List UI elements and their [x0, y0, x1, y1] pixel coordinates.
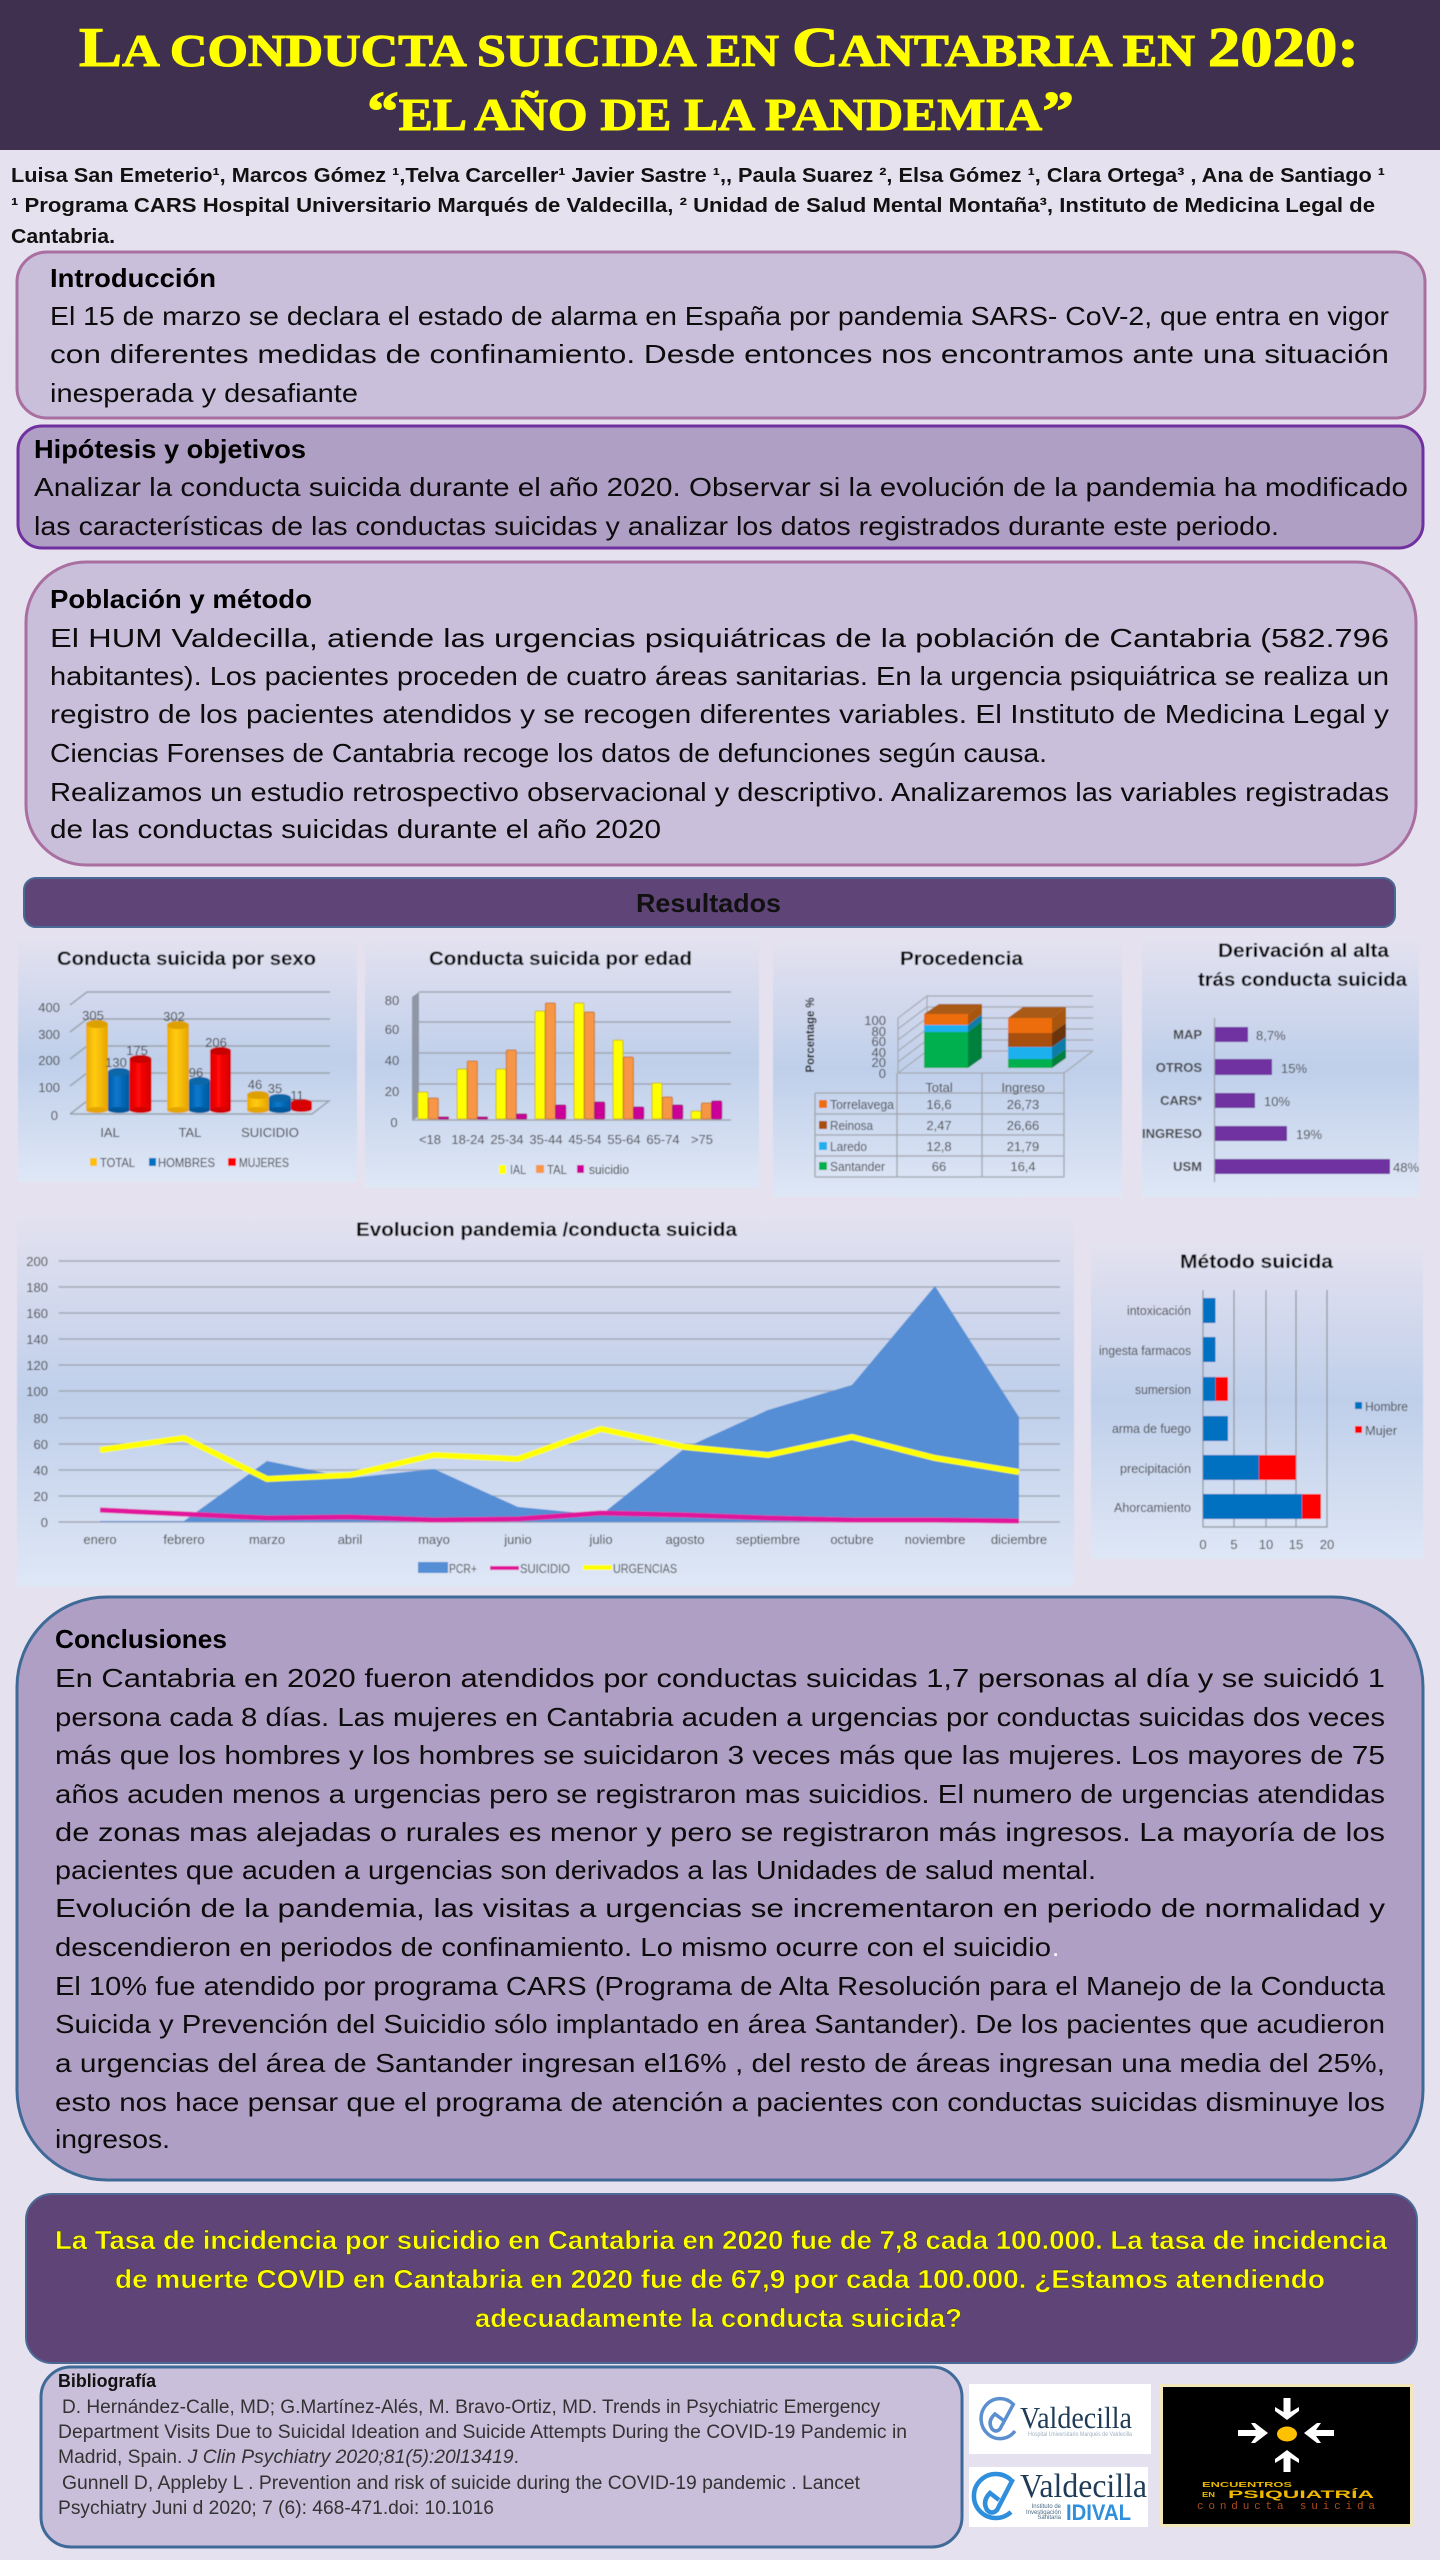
chart: conducta suicida por edad: 60 — [385, 1022, 399, 1037]
month labels: septiembre — [736, 1532, 800, 1547]
chart: evolución pandemia / conducta suicida — [17, 1212, 1074, 1587]
data table — [815, 1073, 1064, 1177]
logo: encuentros en psiquiatría — [1162, 2386, 1412, 2526]
month labels: julio — [588, 1532, 613, 1547]
text: conclusiones: Evolución de la pandemia, las visitas a urgencias se incrementaron en periodo de normalidad y — [55, 1893, 1385, 1923]
category labels: CARS* — [1160, 1093, 1203, 1108]
chart: conducta suicida por sexo: 0 — [51, 1108, 58, 1123]
legend — [418, 1561, 677, 1576]
category labels: OTROS — [1156, 1060, 1202, 1075]
chart: conducta suicida por edad: 80 — [385, 993, 399, 1008]
bars: suicidio — [247, 1091, 312, 1113]
logo: Valdecilla hospital: Valdecilla — [1020, 2400, 1132, 2435]
data labels: 130 — [105, 1055, 127, 1070]
bars: TAL — [428, 1003, 711, 1119]
chart: conducta suicida por sexo: 400 — [38, 1000, 60, 1015]
legend: MUJERES — [239, 1155, 289, 1170]
text: introducción: inesperada y desafiante — [50, 378, 358, 408]
x axis ticks — [1199, 1537, 1334, 1552]
legend: URGENCIAS — [613, 1561, 677, 1576]
text: población: El HUM Valdecilla, atiende las urgencias psiquiátricas de la población de Cantabria (582.796 — [50, 623, 1389, 653]
legend: TOTAL — [100, 1155, 135, 1170]
y axis ticks: 40 — [872, 1045, 886, 1060]
data table: 26,73 — [1007, 1097, 1039, 1112]
y axis labels: 60 — [34, 1437, 48, 1452]
category labels — [1099, 1303, 1191, 1515]
callout: tasa de incidencia — [26, 2194, 1417, 2363]
data table: 2,47 — [926, 1118, 952, 1133]
text: hipótesis: Analizar la conducta suicida durante el año 2020. Observar si la evolución de la pandemia ha modificado — [34, 472, 1408, 502]
category labels: MAP — [1173, 1027, 1202, 1042]
chart: conducta suicida por edad: 40 — [385, 1053, 399, 1068]
data labels: 175 — [126, 1043, 148, 1058]
area: PCR+ — [100, 1286, 1019, 1522]
month labels: febrero — [163, 1532, 205, 1547]
data table: Total — [925, 1080, 953, 1095]
chart title: Método suicida — [1180, 1252, 1333, 1273]
data table: 26,66 — [1007, 1118, 1039, 1133]
legend — [499, 1162, 629, 1177]
value labels: 19% — [1296, 1127, 1322, 1142]
logo: Valdecilla IDIVAL: Investigación — [1026, 2510, 1061, 2516]
month labels: agosto — [665, 1532, 705, 1547]
text: conclusiones: persona cada 8 días. Las mujeres en Cantabria acuden a urgencias por conductas suicidas dos veces — [55, 1702, 1385, 1732]
legend — [1355, 1399, 1408, 1438]
chart: conducta suicida por sexo — [18, 937, 357, 1182]
value labels: 10% — [1264, 1094, 1290, 1109]
chart: derivación al alta — [1142, 937, 1419, 1197]
chart: conducta suicida por sexo: 100 — [38, 1080, 60, 1095]
bars: suicidio — [439, 1101, 722, 1119]
icon: converging arrows — [1238, 2398, 1334, 2472]
chart: conducta suicida por edad — [365, 937, 759, 1188]
category labels: 35-44 — [529, 1132, 563, 1147]
heading: población: Población y método — [50, 584, 312, 614]
category labels: TAL — [179, 1125, 201, 1140]
icon: swirl — [981, 2399, 1015, 2439]
references: Gunnell D, Appleby L . Prevention and risk of suicide during the COVID-19 pandemic . Lancet — [62, 2473, 861, 2494]
legend: HOMBRES — [158, 1155, 215, 1170]
data table: Ingreso — [1001, 1080, 1045, 1095]
banner: resultados: Resultados — [636, 888, 781, 918]
category labels: 25-34 — [490, 1132, 524, 1147]
authors and affiliations: ¹ Programa CARS Hospital Universitario Marqués de Valdecilla, ² Unidad de Salud Mental Montaña³, Instituto de Medicina Legal de — [11, 195, 1375, 217]
line: urgencias — [100, 1429, 1019, 1479]
text: conclusiones: ingresos. — [55, 2124, 170, 2154]
text: conclusiones: pacientes que acuden a urgencias son derivados a las Unidades de salud mental. — [55, 1855, 1096, 1885]
title — [79, 17, 1359, 143]
x axis ticks: 5 — [1230, 1537, 1238, 1552]
legend: PCR+ — [449, 1561, 477, 1576]
text: conclusiones: En Cantabria en 2020 fueron atendidos por conductas suicidas 1,7 personas al día y se suicidó 1 — [55, 1663, 1385, 1693]
references: Department Visits Due to Suicidal Ideation and Suicide Attempts During the COVID-19 Pandemic in — [58, 2422, 907, 2443]
references: D. Hernández-Calle, MD; G.Martínez-Alés, M. Bravo-Ortiz, MD. Trends in Psychiatric Emergency — [62, 2397, 880, 2418]
month labels: noviembre — [905, 1532, 965, 1547]
y axis ticks: 100 — [864, 1013, 886, 1028]
callout: tasa de incidencia: La Tasa de incidencia por suicidio en Cantabria en 2020 fue de 7,8 cada 100.000. La tasa de incidencia — [55, 2225, 1388, 2255]
heading: introducción: Introducción — [50, 263, 216, 293]
text: conclusiones: El 10% fue atendido por programa CARS (Programa de Alta Resolución para el Manejo de la Conducta — [55, 1971, 1386, 2001]
month labels: junio — [503, 1532, 532, 1547]
data labels: 46 — [248, 1077, 262, 1092]
category labels: >75 — [691, 1132, 713, 1147]
text: población: habitantes). Los pacientes proceden de cuatro áreas sanitarias. En la urgencia psiquiátrica se realiza un — [50, 661, 1389, 691]
text: introducción: con diferentes medidas de confinamiento. Desde entonces nos encontramos ante una situación — [50, 339, 1389, 369]
data table: Laredo — [830, 1139, 867, 1154]
header banner — [0, 0, 1440, 150]
category labels: INGRESO — [1142, 1126, 1202, 1141]
references: Psychiatry Juni d 2020; 7 (6): 468-471.doi: 10.1016 — [58, 2498, 494, 2519]
category labels: ingesta farmacos — [1099, 1343, 1191, 1358]
chart: conducta suicida por sexo: 200 — [38, 1053, 60, 1068]
panel: población y método — [26, 562, 1416, 865]
line: suicidio — [100, 1510, 1019, 1521]
text: introducción: El 15 de marzo se declara el estado de alarma en España por pandemia SARS- CoV-2, que entra en vigor — [50, 301, 1389, 331]
y axis labels: 20 — [34, 1489, 48, 1504]
value labels: 48% — [1393, 1160, 1419, 1175]
logo: Valdecilla IDIVAL: Valdecilla — [1020, 2468, 1147, 2505]
y axis ticks: 60 — [872, 1034, 886, 1049]
month labels: diciembre — [991, 1532, 1047, 1547]
month labels — [83, 1532, 1047, 1547]
data labels: 96 — [189, 1065, 203, 1080]
references — [58, 2397, 907, 2519]
category labels: 45-54 — [568, 1132, 602, 1147]
value labels: 8,7% — [1256, 1028, 1286, 1043]
data table: 12,8 — [926, 1139, 952, 1154]
category labels — [419, 1132, 713, 1147]
data labels: 302 — [163, 1009, 185, 1024]
logo: Valdecilla hospital — [969, 2384, 1151, 2454]
data table: 66 — [932, 1159, 946, 1174]
chart title: Evolucion pandemia /conducta suicida — [356, 1220, 737, 1241]
chart: conducta suicida por sexo: 300 — [38, 1027, 60, 1042]
text: conclusiones: más que los hombres y los hombres se suicidaron 3 veces más que las mujeres. Los mayores de 75 — [55, 1740, 1385, 1770]
legend: Hombre — [1365, 1399, 1408, 1414]
legend — [90, 1155, 289, 1170]
category labels: intoxicación — [1127, 1303, 1191, 1318]
panel: bibliografía — [41, 2367, 962, 2547]
text: conclusiones: a urgencias del área de Santander ingresan el16% , del resto de áreas ingresan una media del 25%, — [55, 2048, 1385, 2078]
legend: suicidio — [589, 1162, 629, 1177]
text: conclusiones: Suicida y Prevención del Suicidio sólo implantado en área Santander). De los pacientes que acudieron — [55, 2009, 1385, 2039]
y axis labels — [26, 1254, 48, 1530]
x axis ticks: 0 — [1199, 1537, 1207, 1552]
chart title: Conducta suicida por sexo — [57, 949, 316, 970]
x axis ticks: 10 — [1259, 1537, 1273, 1552]
legend: Mujer — [1365, 1423, 1398, 1438]
logo: Valdecilla IDIVAL — [969, 2467, 1148, 2527]
text: población: Ciencias Forenses de Cantabria recoge los datos de defunciones según causa. — [50, 738, 1047, 768]
chart: procedencia — [773, 940, 1122, 1197]
y axis ticks: 20 — [872, 1055, 886, 1070]
legend: TAL — [547, 1162, 567, 1177]
data table: 21,79 — [1007, 1139, 1039, 1154]
month labels: octubre — [830, 1532, 874, 1547]
heading: bibliografía: Bibliografía — [58, 2371, 157, 2391]
category labels: IAL — [100, 1125, 120, 1140]
category labels: 18-24 — [451, 1132, 485, 1147]
category labels: Ahorcamiento — [1114, 1500, 1191, 1515]
data labels: 206 — [205, 1035, 227, 1050]
text: población: Realizamos un estudio retrospectivo observacional y descriptivo. Analizaremos las variables registradas — [50, 777, 1389, 807]
bars — [1215, 1027, 1390, 1174]
month labels: abril — [338, 1532, 362, 1547]
month labels: marzo — [249, 1532, 285, 1547]
text: introducción — [50, 301, 1389, 408]
logo: encuentros en psiquiatría: EN — [1202, 2492, 1215, 2499]
authors and affiliations: Luisa San Emeterio¹, Marcos Gómez ¹,Telva Carceller¹ Javier Sastre ¹,, Paula Suarez ², Elsa Gómez ¹, Clara Ortega³ , Ana de Santiago ¹ — [11, 165, 1385, 187]
bars: IAL — [418, 1003, 701, 1119]
text: hipótesis — [34, 472, 1408, 541]
category labels: 55-64 — [607, 1132, 641, 1147]
authors and affiliations — [11, 165, 1385, 248]
text: conclusiones: de zonas mas alejadas o rurales es menor y pero se registraron más ingresos. La mayoría de los — [55, 1817, 1385, 1847]
references: Madrid, Spain. J Clin Psychiatry 2020;81(5):20l13419 . — [58, 2447, 519, 2468]
authors and affiliations: Cantabria. — [11, 226, 115, 248]
y axis title: Porcentage % — [803, 997, 817, 1072]
stacked bar: total — [924, 1004, 982, 1068]
panel: hipótesis y objetivos — [18, 426, 1423, 548]
logo: Valdecilla IDIVAL: Sanitaria — [1037, 2515, 1062, 2521]
stacked bar: ingreso — [1008, 1007, 1066, 1068]
chart: conducta suicida por edad: 0 — [390, 1115, 398, 1130]
callout: tasa de incidencia: de muerte COVID en Cantabria en 2020 fue de 67,9 por cada 100.000. ¿Estamos atendiendo — [115, 2264, 1325, 2294]
text: conclusiones: descendieron en periodos de confinamiento. Lo mismo ocurre con el suicidio — [55, 1932, 1051, 1962]
data table: Reinosa — [830, 1118, 874, 1133]
logo: Valdecilla IDIVAL: Instituto de — [1032, 2504, 1062, 2510]
legend: IAL — [510, 1162, 526, 1177]
y axis labels: 140 — [26, 1332, 48, 1347]
y axis labels: 0 — [41, 1515, 48, 1530]
y axis labels: 180 — [26, 1280, 48, 1295]
data labels: 11 — [290, 1088, 304, 1103]
data table: 16,6 — [926, 1097, 952, 1112]
logo: encuentros en psiquiatría: PSIQUIATRÍA — [1228, 2488, 1374, 2501]
bars: TAL — [167, 1021, 231, 1113]
text: conclusiones: años acuden menos a urgencias pero se registraron mas suicidios. El numero de urgencias atendidas — [55, 1779, 1385, 1809]
data table: Santander — [830, 1159, 886, 1174]
category labels: <18 — [419, 1132, 441, 1147]
text: conclusiones — [55, 1663, 1386, 2154]
data labels — [82, 1008, 304, 1103]
x axis ticks: 20 — [1320, 1537, 1334, 1552]
category labels — [100, 1125, 299, 1140]
category labels: SUICIDIO — [241, 1125, 299, 1140]
chart title: Conducta suicida por edad — [429, 949, 692, 970]
chart title — [1198, 941, 1407, 991]
legend: SUICIDIO — [520, 1561, 570, 1576]
data table: Torrelavega — [830, 1097, 895, 1112]
value labels — [1256, 1028, 1419, 1175]
title: LA CONDUCTA SUICIDA EN CANTABRIA EN 2020: — [79, 17, 1359, 79]
category labels: sumersion — [1135, 1382, 1191, 1397]
text: población: de las conductas suicidas durante el año 2020 — [50, 814, 661, 844]
x axis ticks: 15 — [1289, 1537, 1303, 1552]
category labels: USM — [1173, 1159, 1202, 1174]
banner: resultados — [24, 878, 1395, 927]
y axis ticks: 80 — [872, 1024, 886, 1039]
data table: 16,4 — [1010, 1159, 1036, 1174]
text: población: registro de los pacientes atendidos y se recogen diferentes variables. El Instituto de Medicina Legal y — [50, 699, 1389, 729]
text: conclusiones: . — [1052, 1932, 1059, 1962]
category labels: precipitación — [1120, 1461, 1191, 1476]
text: hipótesis: las características de las conductas suicidas y analizar los datos registrados durante este periodo. — [34, 511, 1279, 541]
category labels: 65-74 — [646, 1132, 680, 1147]
y axis labels: 40 — [34, 1463, 48, 1478]
data labels: 35 — [268, 1081, 282, 1096]
y axis labels: 120 — [26, 1358, 48, 1373]
data labels: 305 — [82, 1008, 104, 1023]
icon: swirl — [974, 2474, 1013, 2518]
value labels: 15% — [1281, 1061, 1307, 1076]
title: “EL AÑO DE LA PANDEMIA ” — [367, 81, 1074, 143]
y axis labels: 80 — [34, 1411, 48, 1426]
y axis ticks: 0 — [879, 1066, 886, 1081]
month labels: enero — [83, 1532, 117, 1547]
month labels: mayo — [418, 1532, 450, 1547]
chart title: Derivación al alta — [1218, 941, 1389, 962]
panel: introducción — [17, 252, 1425, 418]
text: conclusiones: esto nos hace pensar que el programa de atención a pacientes con conductas suicidas disminuye los — [55, 2087, 1385, 2117]
logo: encuentros en psiquiatría: ENCUENTROS — [1202, 2482, 1293, 2489]
category labels: arma de fuego — [1112, 1421, 1191, 1436]
panel: conclusiones — [17, 1597, 1423, 2180]
logo: Valdecilla hospital: Hospital Universitario Marqués de Valdecilla — [1028, 2432, 1133, 2438]
category labels — [1142, 1027, 1203, 1174]
y axis labels: 100 — [26, 1384, 48, 1399]
callout: tasa de incidencia: adecuadamente la conducta suicida? — [475, 2303, 962, 2333]
logo: Valdecilla IDIVAL: IDIVAL — [1066, 2500, 1131, 2525]
heading: conclusiones: Conclusiones — [55, 1624, 227, 1654]
y axis labels: 200 — [26, 1254, 48, 1269]
chart title: trás conducta suicida — [1198, 970, 1407, 991]
logo: encuentros en psiquiatría: conducta suicida — [1197, 2501, 1375, 2513]
bars: IAL — [86, 1020, 152, 1113]
chart: método suicida — [1091, 1242, 1423, 1559]
chart title: Procedencia — [900, 949, 1023, 970]
y axis labels: 160 — [26, 1306, 48, 1321]
y axis ticks — [864, 1013, 886, 1081]
chart: conducta suicida por edad: 20 — [385, 1084, 399, 1099]
heading: hipótesis: Hipótesis y objetivos — [34, 434, 306, 464]
stacked bars — [1203, 1298, 1321, 1519]
text: población — [50, 623, 1389, 844]
